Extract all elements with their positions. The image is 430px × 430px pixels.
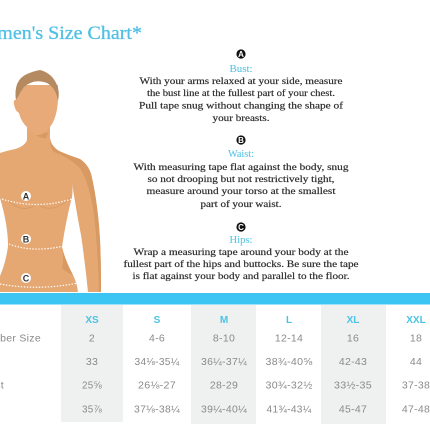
waist instructions: part of your waist. — [200, 199, 282, 209]
body shading — [50, 138, 101, 292]
column XS: XS — [85, 315, 99, 326]
text: bust instructions: With your arms relaxed at your side, measure — [140, 76, 342, 86]
text: bust instructions — [139, 76, 343, 123]
hips instructions: Wrap a measuring tape around your body at the — [134, 247, 348, 257]
column S: 37⅛-38¼ — [134, 404, 180, 416]
column S: 34⅛-35¼ — [134, 356, 180, 368]
hips instructions — [124, 247, 359, 281]
text: bust instructions: the bust line at the fullest part of your chest. — [147, 88, 335, 98]
column M: 28-29 — [210, 380, 238, 392]
icon: A badge — [236, 49, 246, 59]
marker A on body — [21, 191, 31, 202]
column M: 36¼-37¼ — [201, 356, 247, 368]
column XS: 25⅝ — [82, 380, 102, 392]
marker C on body: C — [23, 274, 30, 284]
figure: woman's torso — [0, 70, 101, 292]
column XXL: 44 — [410, 356, 422, 368]
section: hips — [124, 222, 359, 281]
column M: M — [220, 315, 228, 326]
column S — [134, 315, 180, 416]
column XS: 35⅞ — [82, 404, 102, 416]
hips instructions: is flat against your body and parallel to the floor. — [132, 271, 350, 281]
column XL: 16 — [347, 332, 359, 344]
heading: bust: Bust: — [230, 64, 252, 75]
waist instructions: With measuring tape flat against the body, snug — [134, 162, 349, 172]
table top bar — [0, 293, 430, 304]
tape line: hips — [0, 283, 78, 287]
heading: waist: Waist: — [228, 149, 254, 160]
column XXL — [402, 315, 430, 416]
size table — [0, 293, 430, 424]
marker C on body — [21, 273, 31, 284]
neck shadow — [36, 132, 49, 138]
tape line: bust — [2, 199, 72, 204]
marker B on body: B — [23, 234, 30, 244]
waist instructions: so not drooping but not restrictively tight, — [148, 174, 334, 184]
hips instructions: fullest part of the hips and buttocks. Be sure the tape — [124, 259, 359, 269]
icon: C badge: C — [238, 223, 244, 232]
column XXL: 47-48 — [402, 404, 430, 416]
icon: B badge: B — [238, 136, 244, 145]
icon: B badge — [236, 135, 246, 145]
column L: L — [286, 315, 292, 326]
column L — [266, 315, 312, 416]
text: bust instructions: Pull tape snug without changing the shape of — [139, 100, 343, 110]
tape line: waist — [9, 244, 64, 249]
column XL — [334, 315, 372, 416]
head — [14, 85, 58, 135]
section: bust — [139, 49, 343, 123]
column S: 4-6 — [149, 332, 165, 344]
column L: 38¾-40⅝ — [266, 356, 312, 368]
column XS: 2 — [89, 332, 95, 344]
section: waist — [134, 135, 349, 209]
column XXL: 18 — [410, 332, 422, 344]
column XXL: 37-38 — [402, 380, 430, 392]
column XXL: XXL — [406, 315, 426, 326]
column XL: XL — [347, 315, 359, 326]
column S: S — [154, 315, 161, 326]
icon: C badge — [236, 222, 246, 232]
icon: A badge: A — [238, 50, 244, 59]
column shading XL — [321, 305, 386, 424]
column M: 8-10 — [213, 332, 235, 344]
column M: 39¼-40¼ — [201, 404, 247, 416]
column M — [201, 315, 247, 416]
column S: 26⅛-27 — [138, 380, 176, 392]
marker A on body: A — [23, 192, 30, 202]
column shading M — [191, 305, 256, 424]
hair — [15, 70, 59, 101]
body silhouette — [0, 125, 101, 292]
text: bust instructions: your breasts. — [212, 113, 270, 123]
column L: 12-14 — [275, 332, 303, 344]
column shading XS — [61, 305, 123, 422]
marker B on body — [21, 234, 31, 244]
column XS: 33 — [86, 356, 98, 368]
heading: hips: Hips: — [230, 235, 252, 246]
breast contour shading — [8, 198, 70, 208]
column XL: 42-43 — [339, 356, 367, 368]
column L: 41¾-43¼ — [266, 404, 312, 416]
waist instructions — [134, 162, 349, 209]
waist instructions: measure around your torso at the smallest — [146, 186, 336, 196]
column XL: 45-47 — [339, 404, 367, 416]
column XS — [82, 315, 102, 416]
column L: 30¾-32½ — [266, 380, 312, 392]
column XL: 33½-35 — [334, 380, 372, 392]
